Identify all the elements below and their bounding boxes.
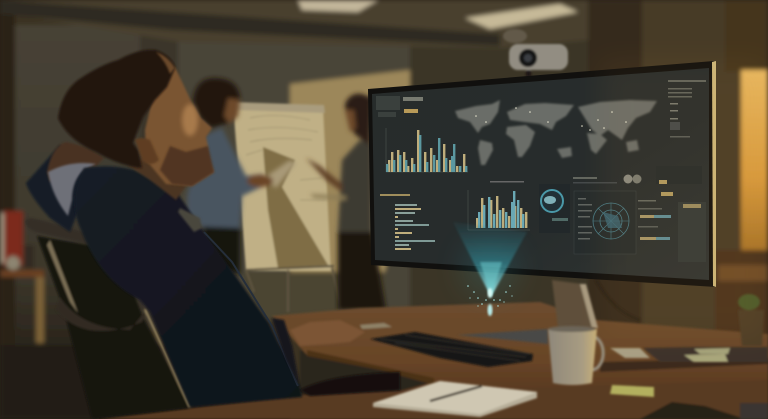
red binder (3, 211, 23, 266)
bar chart: upper left (386, 128, 468, 172)
scribbles (246, 115, 326, 200)
hologram base glow (488, 304, 492, 316)
ear (135, 138, 159, 164)
hair (345, 94, 372, 146)
screen (372, 68, 709, 280)
hair (58, 50, 175, 168)
right pillar (588, 0, 642, 330)
hologram cone (453, 222, 527, 316)
shirt collar (178, 208, 202, 232)
beard (160, 146, 214, 186)
laptop corner (640, 402, 745, 419)
arm (306, 158, 342, 192)
centre column (140, 30, 180, 330)
mouse pad and papers (610, 347, 768, 362)
raised sleeve (26, 145, 90, 232)
desk surface (100, 302, 768, 419)
left pillar (0, 0, 15, 345)
monitor edge light (712, 61, 716, 287)
floor (0, 345, 290, 419)
bar chart: centre (468, 181, 530, 230)
colleague shirt (187, 128, 268, 228)
desk (100, 302, 768, 419)
monitor cable (596, 280, 640, 320)
coffee mug (548, 326, 603, 385)
dim wall below board (245, 272, 385, 320)
blurred colleague pointing (306, 94, 386, 310)
window frame (725, 0, 768, 72)
notebook and pen (373, 381, 537, 417)
ceiling light left (298, 0, 378, 12)
lower right wall (715, 250, 768, 340)
device corner (740, 403, 768, 419)
under-desk shadow (300, 350, 440, 396)
colleague trousers (203, 222, 240, 275)
front desk plane (100, 380, 768, 419)
trousers (338, 230, 386, 310)
colleague hand (247, 175, 273, 187)
monitor base (457, 329, 548, 344)
held tablet (310, 194, 346, 200)
radar panel (574, 191, 636, 254)
ceiling (0, 0, 768, 48)
neck (128, 150, 186, 200)
sunlight patch on wall (290, 70, 410, 272)
hologram glow (462, 240, 518, 296)
shadow on whiteboard (263, 147, 328, 268)
colleague hair (193, 78, 240, 128)
monitor bezel (368, 61, 716, 287)
sticky note on desk (610, 385, 654, 397)
shelf objects (6, 256, 20, 270)
jacket cuff (272, 318, 300, 387)
small globe panel (539, 184, 570, 233)
map city lights (475, 107, 627, 131)
potted plant (738, 294, 764, 346)
shirt sleeve (48, 163, 96, 216)
office chair (25, 218, 190, 419)
whiteboard easel (233, 102, 342, 312)
paper by hand (360, 323, 392, 329)
top-left widgets (376, 96, 423, 117)
right status bars (638, 200, 671, 240)
easel legs (246, 266, 342, 312)
face (345, 110, 356, 132)
torso (338, 140, 372, 232)
world map (455, 100, 657, 165)
jacket body (74, 166, 302, 407)
hair highlight (156, 52, 175, 74)
blurred colleague with tablet (187, 78, 296, 275)
monitor (368, 61, 716, 287)
colleague face (224, 98, 240, 124)
face (145, 67, 214, 186)
lapel (204, 232, 298, 386)
hologram particles (467, 285, 513, 307)
ceiling light right (465, 4, 578, 29)
back wall centre (178, 40, 588, 320)
window (741, 70, 768, 250)
ceiling beam (0, 0, 500, 46)
warm light overlay (600, 60, 768, 340)
trousers (300, 372, 400, 396)
cheek highlight (182, 104, 198, 136)
back wall right shade (410, 40, 590, 320)
forearm and hand on desk (290, 320, 365, 346)
right counter (718, 265, 768, 281)
desk front edge (307, 350, 434, 385)
left shelf (0, 270, 44, 277)
raised hand skin (47, 142, 104, 182)
keyboard (370, 332, 533, 367)
back wall left (14, 25, 140, 355)
webcam (503, 29, 568, 77)
right sidebar panels (656, 80, 706, 262)
tablet (264, 160, 296, 188)
small gauges (573, 174, 642, 184)
monitor stand (457, 280, 640, 344)
right desk shadow band (600, 358, 768, 372)
hologram apex (488, 288, 492, 298)
man in navy jacket (26, 50, 400, 407)
horizontal bar chart: lower left (380, 194, 435, 250)
